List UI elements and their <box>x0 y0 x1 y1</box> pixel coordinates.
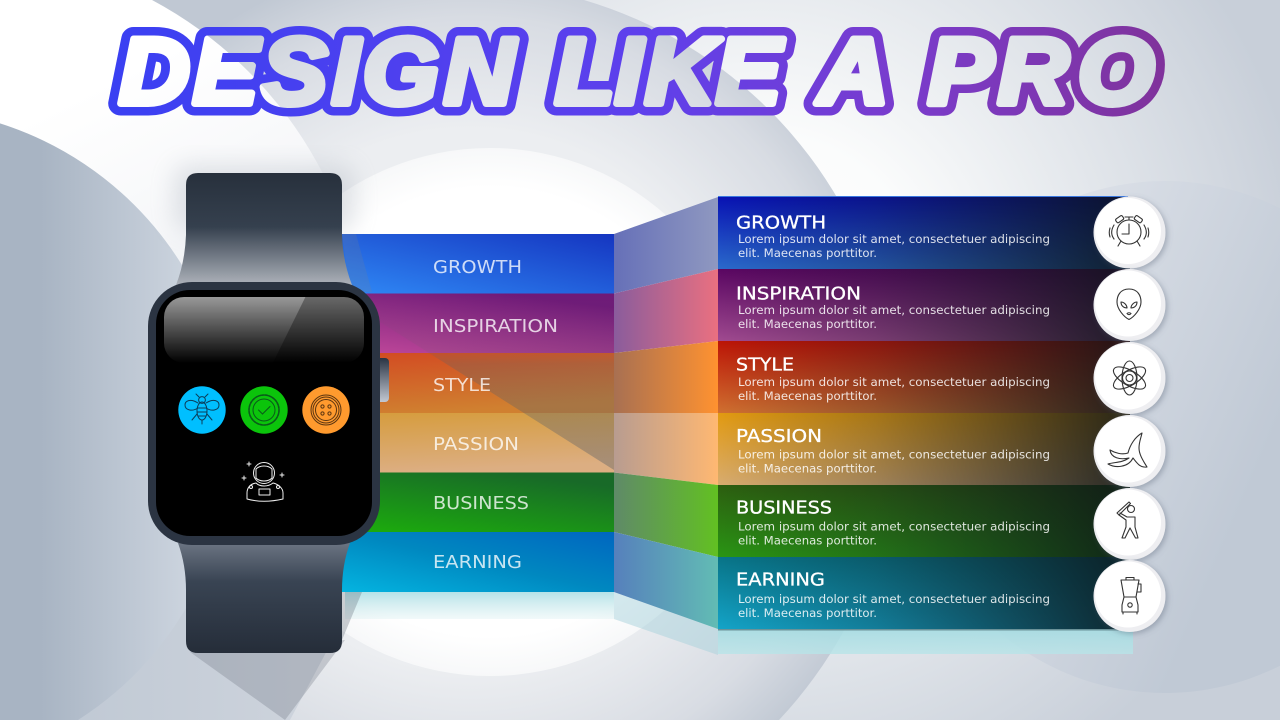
bar: growth <box>718 197 1130 269</box>
text block: style: elit. Maecenas porttitor. <box>738 389 877 403</box>
text block: inspiration: INSPIRATION <box>736 284 861 304</box>
connector: earning <box>614 532 718 629</box>
panel: right reflection <box>718 629 1133 654</box>
bottom strap <box>178 543 350 653</box>
panel: left colour bands <box>342 234 614 619</box>
text block: inspiration: Lorem ipsum dolor sit amet, consectetuer adipiscing <box>738 303 1050 317</box>
crown <box>376 358 389 402</box>
band: growth <box>342 234 614 294</box>
band: passion <box>342 413 614 472</box>
text block: growth: Lorem ipsum dolor sit amet, consectetuer adipiscing <box>738 232 1050 246</box>
bar: earning <box>718 557 1130 629</box>
screen <box>156 290 372 536</box>
text block: earning <box>736 570 1050 620</box>
text block: earning: Lorem ipsum dolor sit amet, consectetuer adipiscing <box>738 592 1050 606</box>
icon: astronaut <box>242 462 284 501</box>
bar: business <box>718 485 1130 557</box>
text block: passion: Lorem ipsum dolor sit amet, consectetuer adipiscing <box>738 448 1050 462</box>
band: earning <box>342 532 614 592</box>
band: business <box>342 472 614 532</box>
strap shadows <box>174 165 372 720</box>
bar: inspiration <box>718 269 1130 341</box>
panel: middle perspective connector <box>614 197 718 655</box>
icon: alien <box>1094 269 1166 341</box>
text block: earning: elit. Maecenas porttitor. <box>738 606 877 620</box>
connector: inspiration <box>614 269 718 353</box>
text block: passion: PASSION <box>736 426 822 447</box>
text block: style <box>736 354 1050 403</box>
connector: growth <box>614 197 718 294</box>
text block: inspiration: elit. Maecenas porttitor. <box>738 317 877 331</box>
text block: growth: elit. Maecenas porttitor. <box>738 246 877 260</box>
connector: passion <box>614 413 718 485</box>
icon: banana peel <box>1094 415 1166 487</box>
label: style: STYLE <box>433 375 491 396</box>
text block: passion: elit. Maecenas porttitor. <box>738 462 877 476</box>
watch <box>148 165 389 720</box>
connector: business <box>614 472 718 557</box>
label: business: BUSINESS <box>433 493 529 514</box>
right icon circles <box>1094 196 1166 632</box>
text block: inspiration <box>736 284 1050 331</box>
screen glare <box>164 297 364 363</box>
band: style <box>342 353 614 413</box>
right text blocks <box>736 212 1050 620</box>
text block: style: STYLE <box>736 354 794 376</box>
icon: badge check <box>240 386 288 434</box>
text block: growth <box>736 212 1050 260</box>
label: inspiration: INSPIRATION <box>433 316 558 337</box>
text block: business <box>736 498 1050 548</box>
text block: earning: EARNING <box>736 570 825 590</box>
band: inspiration <box>342 294 614 353</box>
icon: atom <box>1094 342 1166 414</box>
title <box>108 26 1165 116</box>
left labels <box>433 257 558 573</box>
label: growth: GROWTH <box>433 257 522 278</box>
connector: style <box>614 341 718 413</box>
text block: business: BUSINESS <box>736 498 832 518</box>
text block: business: Lorem ipsum dolor sit amet, consectetuer adipiscing <box>738 520 1050 534</box>
icon: alarm clock <box>1094 196 1166 268</box>
top strap <box>176 173 352 285</box>
panel: right colour bars <box>718 196 1130 630</box>
text block: growth: GROWTH <box>736 212 826 234</box>
watch case <box>148 282 380 545</box>
label: passion: PASSION <box>433 434 519 455</box>
icon: bee <box>178 386 226 434</box>
icon: baseball batter <box>1094 488 1166 560</box>
text block: passion <box>736 426 1050 476</box>
icon: blender <box>1094 560 1166 632</box>
icon: button <box>302 386 350 434</box>
bar: passion <box>718 413 1130 485</box>
bar: style <box>718 341 1130 413</box>
band: reflection <box>345 592 614 619</box>
text block: style: Lorem ipsum dolor sit amet, consectetuer adipiscing <box>738 375 1050 389</box>
label: earning: EARNING <box>433 552 522 573</box>
text block: business: elit. Maecenas porttitor. <box>738 534 877 548</box>
connector reflection <box>614 592 718 655</box>
